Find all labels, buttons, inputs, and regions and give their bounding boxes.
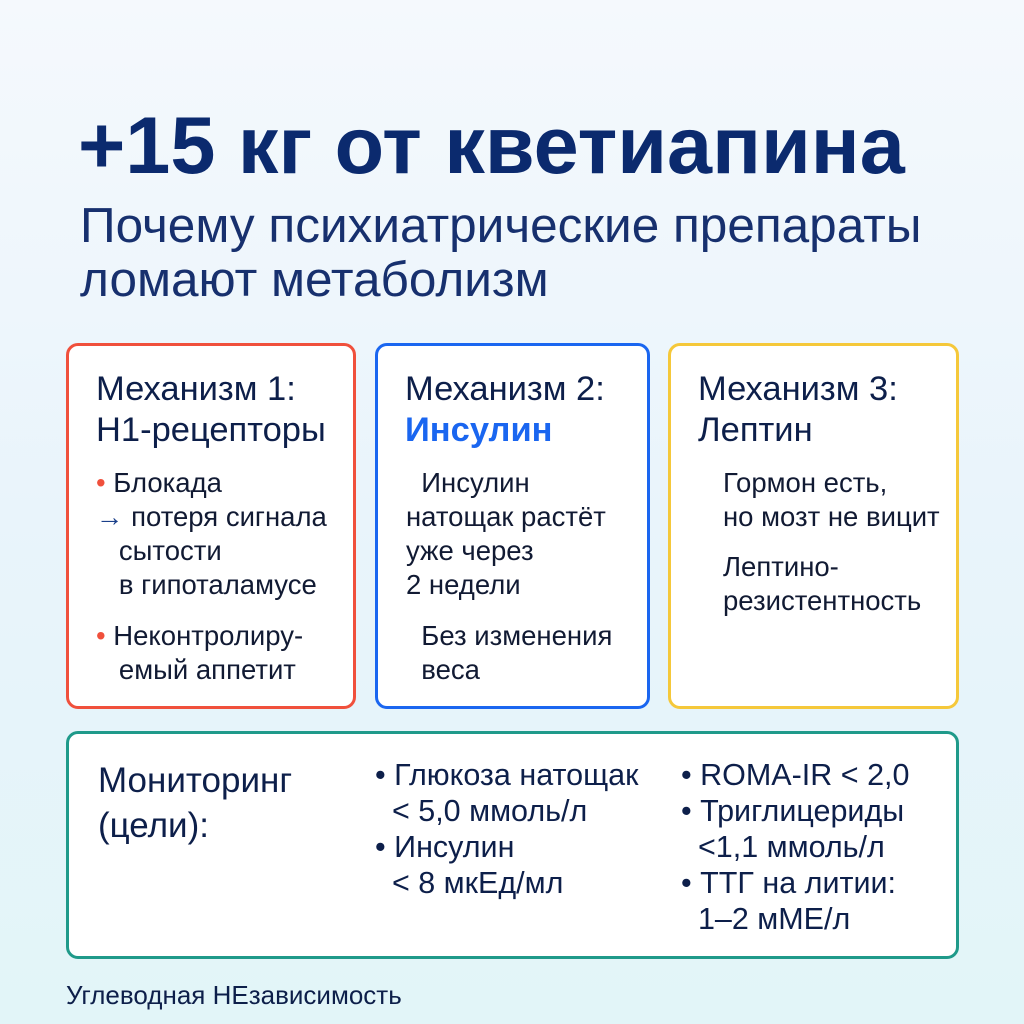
panel: monitoring: < 5,0 ммоль/л [392, 794, 587, 828]
panel: mechanism 3: Лептин [698, 411, 813, 449]
title: +15 кг от кветиапина [78, 101, 905, 191]
subtitle: Почему психиатрические препараты [80, 198, 921, 253]
subtitle: ломают метаболизм [80, 252, 549, 307]
panel: monitoring: (цели): [98, 806, 209, 845]
panel: mechanism 3: но мозт не вицит [723, 501, 940, 532]
panel: mechanism 2: Инсулин [405, 411, 553, 449]
panel: monitoring: 1–2 мМЕ/л [698, 902, 850, 936]
panel: mechanism 1: в гипоталамусе [119, 569, 317, 600]
footer: Углеводная НЕзависимость [66, 980, 402, 1010]
panel: mechanism 1 [66, 343, 356, 709]
panel: monitoring [66, 731, 959, 959]
panel: mechanism 2 [375, 343, 650, 709]
panel: mechanism 3: Лептино- [723, 551, 839, 582]
panel: mechanism 2: Механизм 2: [405, 370, 605, 408]
panel: monitoring: <1,1 ммоль/л [698, 830, 885, 864]
panel: mechanism 1: • Неконтролиру- [96, 620, 303, 651]
panel: monitoring: • Триглицериды [681, 794, 904, 828]
panel: mechanism 1: H1-рецепторы [96, 411, 326, 449]
panel: mechanism 2: веса [421, 654, 480, 685]
panel: mechanism 1: Механизм 1: [96, 370, 296, 408]
panel: mechanism 1: сытости [119, 535, 222, 566]
subtitle [80, 198, 921, 307]
panel: monitoring: • ROMA-IR < 2,0 [681, 758, 909, 792]
panel: mechanism 2: натощак растёт [406, 501, 606, 532]
panel: mechanism 2: 2 недели [406, 569, 521, 600]
panel: mechanism 1: емый аппетит [119, 654, 296, 685]
panel: mechanism 3: резистентность [723, 585, 921, 616]
panel: mechanism 1: • Блокада [96, 467, 222, 498]
panel: mechanism 2: Без изменения [421, 620, 612, 651]
panel: monitoring: • ТТГ на литии: [681, 866, 896, 900]
panel: mechanism 1: → потеря сигнала [96, 501, 327, 532]
panel: monitoring: Мониторинг [98, 761, 292, 800]
panel: mechanism 3: Гормон есть, [723, 467, 887, 498]
panel: monitoring: • Инсулин [375, 830, 514, 864]
panel: monitoring: < 8 мкЕд/мл [392, 866, 563, 900]
panel: mechanism 2: Инсулин [421, 467, 530, 498]
panel: monitoring: • Глюкоза натощак [375, 758, 638, 792]
panel: mechanism 2: уже через [406, 535, 534, 566]
panel: mechanism 3 [668, 343, 959, 709]
panel: mechanism 3: Механизм 3: [698, 370, 898, 408]
